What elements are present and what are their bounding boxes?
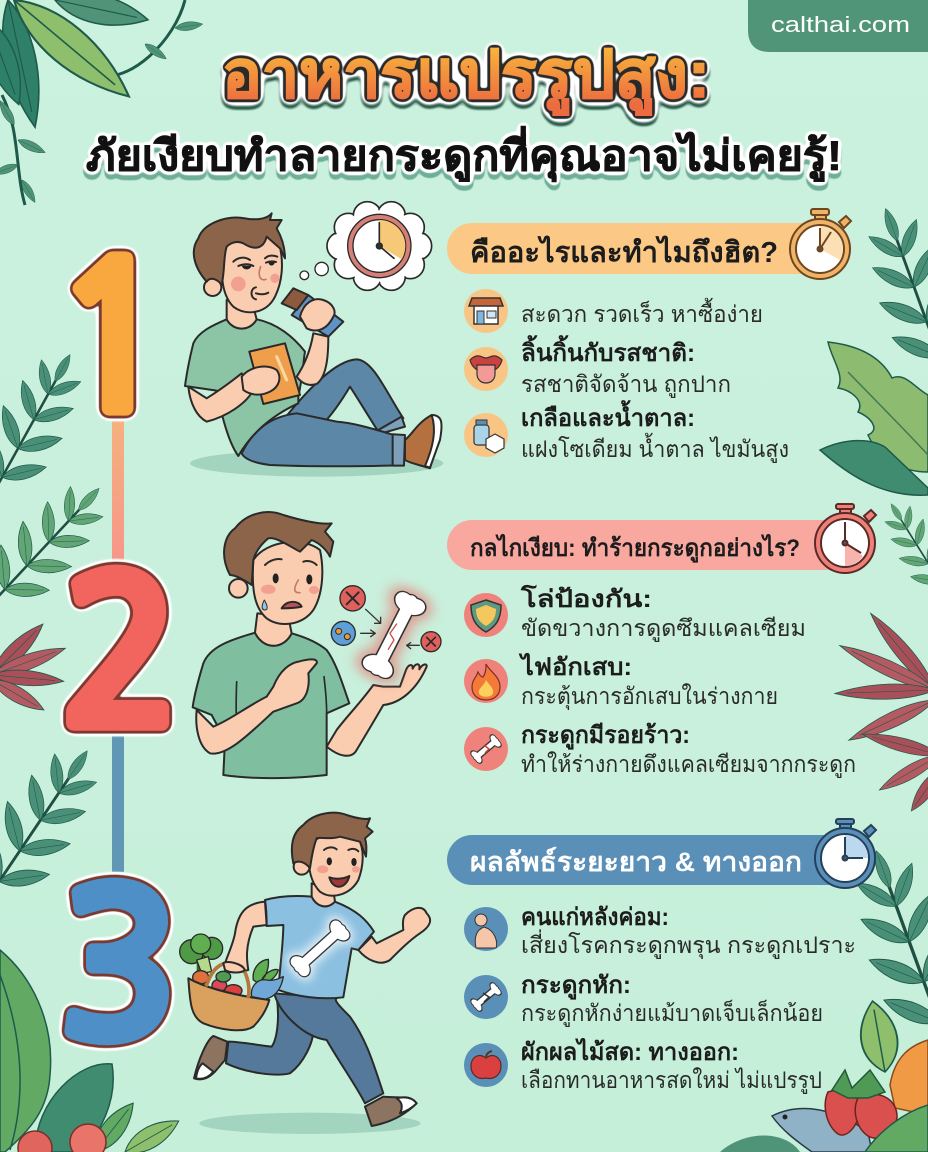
item: fracture [464,972,823,1027]
text: แฝงโซเดียม น้ำตาล ไขมันสูง [521,433,789,463]
stopwatch icon red [815,504,876,573]
text: ไฟอักเสบ: [518,652,632,681]
item: convenience [464,289,763,333]
item: salt and sugar [464,399,789,463]
text: ผักผลไม้สด: ทางออก: [521,1037,739,1066]
site tab: calthai.com: calthai.com [771,12,910,37]
text [521,972,823,1027]
plants and fresh food: bottom right [720,834,928,1152]
text [521,1037,822,1094]
basket of fresh food [180,934,283,1030]
item: cracked bone [464,722,856,778]
number 2: 2 [59,555,183,756]
plants: bottom left foliage [0,950,184,1152]
text: ขัดขวางการดูดซึมแคลเซียม [521,615,806,642]
item: taste [464,334,731,398]
text: กระดูกหัก: [521,972,631,1000]
text [520,584,806,642]
item: convenience: สะดวก รวดเร็ว หาซื้อง่าย [521,298,763,327]
text: ลิ้นกิ้นกับรสชาติ: [521,334,695,367]
number 1: 1 [51,240,175,441]
text: โล่ป้องกัน: [520,584,652,613]
title [86,37,842,182]
text [521,334,731,398]
header pill 2: กลไกเงียบ: ทำร้ายกระดูกอย่างไร? [470,533,800,563]
stopwatch icon orange [790,209,851,279]
glowing bone on shirt [287,917,353,980]
header pill 1: คืออะไรและทำไมถึงฮิต? [470,235,778,269]
site tab: calthai.com [748,0,928,52]
header pill 3: ผลลัพธ์ระยะยาว & ทางออก [470,846,802,877]
glowing cracked bone [359,588,429,682]
text [521,722,856,778]
text [518,652,778,710]
blocker icons and arrows [331,586,441,652]
illustration: man eating snacks [185,202,443,477]
text: เลือกทานอาหารสดใหม่ ไม่แปรรูป [521,1067,822,1094]
main title line: อาหารแปรรูปสูง: [222,37,710,116]
section 3 [447,819,876,1094]
number 3: 3 [57,868,181,1069]
illustration: running man with basket [180,813,430,1134]
text: กระดูกหักง่ายแม้บาดเจ็บเล็กน้อย [521,998,823,1027]
thought bubble with clock [327,202,432,290]
connector line 2 to 3 [112,732,124,872]
plants: left side foliage [0,336,127,919]
text: เสี่ยงโรคกระดูกพรุน กระดูกเปราะ [521,929,856,959]
text [521,399,789,463]
stopwatch icon blue [815,819,876,888]
section 1 [447,209,851,463]
text: รสชาติจัดจ้าน ถูกปาก [521,371,731,398]
text: เกลือและน้ำตาล: [521,399,695,432]
text: ทำให้ร่างกายดึงแคลเซียมจากกระดูก [521,751,856,778]
plants: right side foliage [820,194,928,815]
subtitle line: ภัยเงียบทำลายกระดูกที่คุณอาจไม่เคยรู้! [86,126,842,182]
item: fresh produce [464,1037,822,1094]
header pill 1 [447,223,832,274]
item: shield [464,584,806,642]
header pill 3 [447,835,852,885]
header pill 2 [447,520,852,570]
section 2 [447,504,876,778]
text: กระดูกมีรอยร้าว: [521,722,690,750]
item: inflammation [464,652,778,710]
text [521,904,856,959]
text: กระตุ้นการอักเสบในร่างกาย [521,683,778,710]
connector line 1 to 2 [112,415,124,560]
text: คนแก่หลังค่อม: [521,904,669,931]
item: elderly [464,904,856,959]
plants: top left foliage [0,0,203,205]
illustration: worried man with cracked bone [193,512,441,778]
